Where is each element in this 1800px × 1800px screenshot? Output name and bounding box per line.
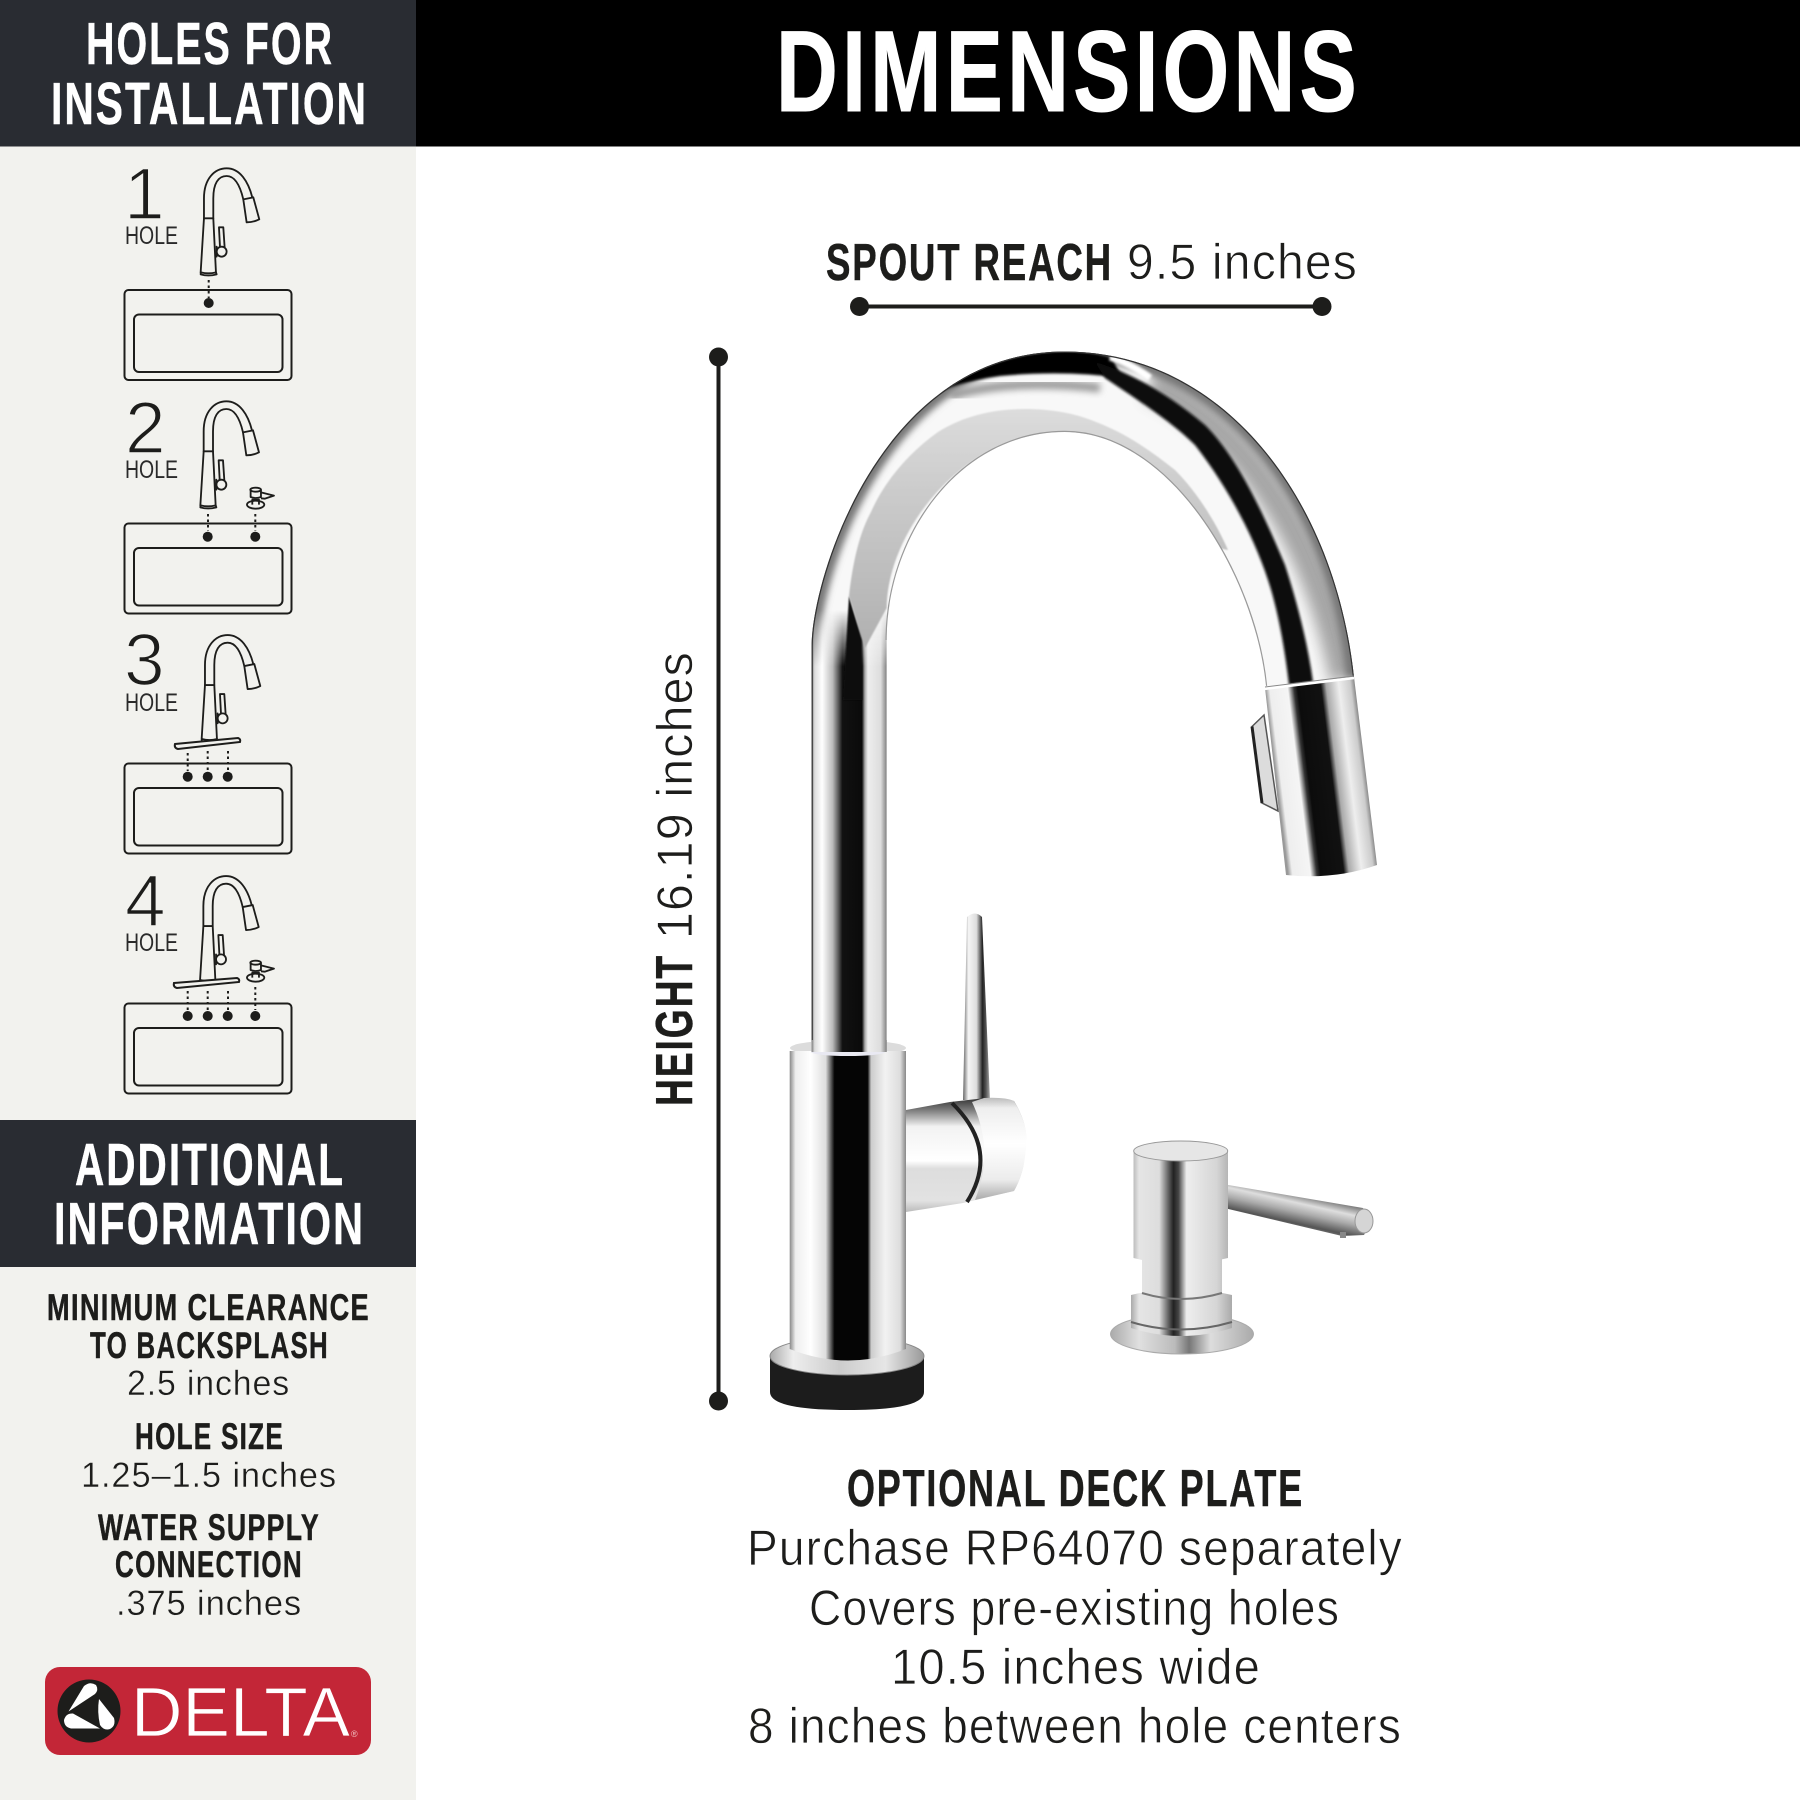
heading line: additional: ADDITIONAL (75, 1132, 345, 1198)
panel: holes for installation heading (0, 0, 416, 146)
icon: sink with three holes (124, 751, 292, 854)
product: soap dispenser (1110, 1141, 1373, 1354)
label: hole: HOLE (125, 456, 178, 484)
text block: hole size: HOLE SIZE (135, 1416, 284, 1457)
icon: soap dispenser (247, 961, 274, 982)
text block: optional deck plate (747, 1460, 1403, 1754)
text block: minimum clearance (47, 1287, 370, 1403)
faucet base chrome ring (770, 1337, 924, 1375)
icon: sink with one hole (124, 280, 292, 380)
diagram: 4 hole (124, 861, 292, 1094)
text block: hole size: 1.25–1.5 inches (81, 1456, 337, 1495)
text block: minimum clearance: TO BACKSPLASH (90, 1325, 329, 1366)
faucet spout tube (800, 340, 1370, 1070)
logo: delta (45, 1667, 371, 1755)
icon: faucet (200, 876, 259, 983)
text block: minimum clearance: 2.5 inches (127, 1364, 290, 1403)
height dimension line (709, 348, 728, 1410)
icon: delta mark (58, 1680, 120, 1742)
text block: minimum clearance: MINIMUM CLEARANCE (47, 1287, 370, 1328)
spout reach label: SPOUT REACH (826, 234, 1113, 292)
icon: deck plate (175, 738, 240, 749)
spray head (1252, 676, 1377, 876)
deck plate heading: OPTIONAL DECK PLATE (847, 1460, 1304, 1518)
dispenser base plate (1110, 1314, 1254, 1354)
height label: HEIGHT (646, 954, 704, 1106)
faucet body (790, 1040, 906, 1360)
deck plate line 2: Covers pre-existing holes (809, 1580, 1340, 1636)
product: chrome kitchen faucet (770, 340, 1377, 1410)
panel: additional information heading (0, 1120, 416, 1267)
text block: water supply connection: WATER SUPPLY (98, 1507, 320, 1548)
dispenser cap (1134, 1141, 1228, 1264)
number 2: 2 (125, 388, 166, 469)
title: DIMENSIONS (776, 8, 1361, 136)
label: hole: HOLE (125, 929, 178, 957)
deck plate line 4: 8 inches between hole centers (748, 1698, 1402, 1754)
label: hole: HOLE (125, 689, 178, 717)
faucet lever (963, 914, 990, 1100)
panel: dimensions title bar (416, 0, 1800, 146)
dispenser spout (1203, 1181, 1373, 1238)
diagram: 3 hole (124, 620, 292, 854)
diagram: 1 hole (124, 154, 292, 380)
icon: sink with four holes (124, 987, 292, 1094)
heading line: information: INFORMATION (54, 1191, 365, 1257)
text block: water supply connection (98, 1507, 320, 1623)
diagram: 2 hole (124, 388, 292, 614)
label: hole: HOLE (125, 222, 178, 250)
height label (646, 651, 704, 1106)
spout reach dimension line (850, 297, 1332, 316)
icon: faucet (202, 635, 260, 742)
text block: water supply connection: CONNECTION (115, 1544, 303, 1585)
number 3: 3 (124, 620, 165, 701)
number 1: 1 (124, 154, 165, 235)
icon: faucet (200, 401, 259, 508)
registered mark: ® (351, 1729, 358, 1739)
deck plate line 1: Purchase RP64070 separately (747, 1520, 1403, 1576)
heading line: holes for: HOLES FOR (86, 11, 334, 77)
height label: 16.19 inches (647, 651, 703, 939)
icon: deck plate (174, 978, 239, 988)
icon: faucet (201, 168, 259, 275)
panel: left sidebar background (0, 0, 416, 1800)
dispenser neck (1142, 1255, 1222, 1302)
text block: hole size (81, 1416, 337, 1495)
faucet handle (906, 1098, 1026, 1212)
wordmark: DELTA (131, 1673, 350, 1751)
number 4: 4 (125, 861, 166, 942)
faucet base black (770, 1355, 924, 1410)
icon: sink with two holes (124, 514, 292, 614)
deck plate line 3: 10.5 inches wide (891, 1639, 1261, 1695)
spout reach label: 9.5 inches (1127, 234, 1358, 290)
icon: soap dispenser (247, 488, 274, 509)
heading line: installation: INSTALLATION (51, 71, 368, 137)
text block: water supply connection: .375 inches (116, 1584, 302, 1623)
dispenser collar (1131, 1289, 1232, 1336)
